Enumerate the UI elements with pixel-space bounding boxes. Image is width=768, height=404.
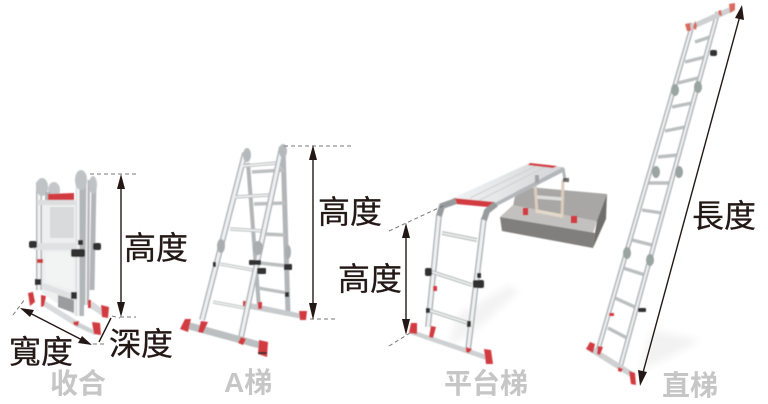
caption: folded: 收合	[50, 368, 106, 399]
label: A-frame height: 高度	[318, 194, 382, 230]
caption: platform ladder: 平台梯	[444, 367, 528, 399]
step block	[500, 186, 607, 248]
straight ladder	[586, 3, 735, 385]
A-frame height arrow	[284, 145, 352, 320]
straight ladder shadow	[640, 330, 700, 370]
folded height arrow	[90, 174, 137, 317]
folded depth arrow	[93, 316, 120, 344]
label: depth: 深度	[109, 326, 173, 362]
platform shadow	[448, 285, 518, 345]
label: width: 寬度	[9, 334, 73, 370]
folded width arrow	[13, 299, 92, 345]
label: folded height: 高度	[124, 230, 188, 266]
straight length arrow	[638, 5, 744, 386]
label: length: 長度	[692, 198, 756, 234]
folded ladder	[28, 170, 109, 335]
A-frame ladder	[180, 144, 307, 357]
caption: straight ladder: 直梯	[662, 370, 718, 401]
platform ladder	[409, 163, 577, 364]
caption: A ladder: A梯	[224, 367, 272, 398]
label: platform height: 高度	[338, 261, 402, 297]
platform height arrow	[389, 205, 445, 346]
